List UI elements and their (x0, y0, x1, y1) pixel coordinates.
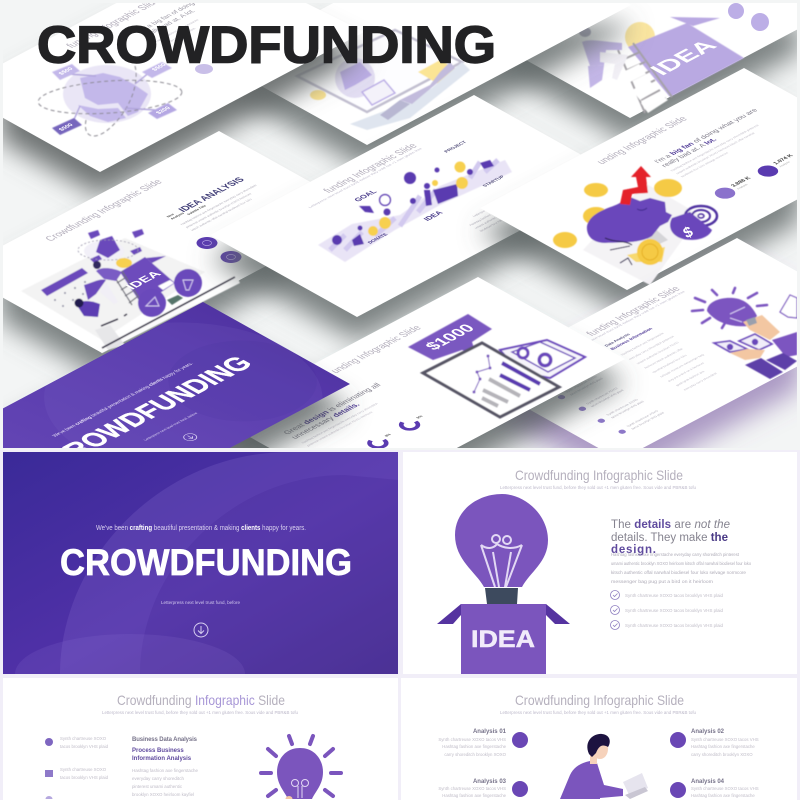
cover title: CROWDFUNDING (39, 352, 260, 470)
analysis 02 (691, 729, 759, 757)
illustration: price tag, cash and chart clipboard (408, 314, 585, 417)
illustration: globe with price tags (37, 62, 183, 136)
donut stats: 9% (384, 433, 393, 438)
text column: tacos brooklyn VHS plaid (569, 377, 604, 396)
slide title: Crowdfunding Infographic Slide (515, 692, 684, 708)
analysis icons (512, 732, 686, 798)
analysis 03: Hashtag fashion axe fingerstache (442, 793, 507, 798)
slide title: Crowdfunding Infographic Slide (515, 467, 683, 483)
description text (469, 210, 502, 232)
analysis text: kitsch authentic offal narwhal biodiesel four loko (190, 198, 253, 232)
slide title: Crowdfunding Infographic Slide (43, 178, 165, 243)
heading text: Great design is eliminating all (281, 382, 383, 436)
text column: narwhal biodiesel four loko (651, 354, 688, 374)
analysis 02: Hashtag fashion axe fingerstache (691, 744, 755, 749)
illustration: idea box and ladder (579, 17, 744, 113)
check list: Synth chartreuse XOXO tacos brooklyn VHS plaid (625, 608, 724, 613)
analysis text: Subtitle Title (186, 204, 207, 216)
illustration: person reading (560, 734, 648, 799)
heading text: unnecessary details. (289, 401, 362, 440)
donut stats (365, 413, 432, 449)
price tags: $500 (58, 67, 76, 76)
analysis text: Hashtag fashion axe fingerstache everyday carry shoreditch (179, 184, 258, 226)
analysis 02: carry shoreditch brooklyn XOXO (691, 752, 753, 757)
panel: isometric purple cover slide (0, 291, 380, 519)
text column: Synth chartreuse XOXO (585, 387, 619, 405)
business data text: brooklyn XOXO heirloom kayfiel (132, 792, 194, 797)
heading text: biodiesel four loko selvage normcore (680, 151, 730, 178)
analysis 01: Hashtag fashion axe fingerstache (442, 744, 507, 749)
icons and captions: tacos brooklyn VHS plaid (60, 775, 109, 780)
analysis text: brooklyn VHS plaid (243, 238, 271, 252)
stats: 3.888 K (730, 176, 753, 188)
text column: Data Analysis (603, 332, 632, 347)
text column: pug put a bird on it heirloom (667, 362, 706, 382)
icons and captions: tacos brooklyn VHS plaid (60, 744, 109, 749)
business data text: Process Business (132, 748, 184, 754)
price tag label: $1000 (422, 322, 479, 353)
business data text: Business Data Analysis (132, 737, 198, 743)
description text: umami authentic brooklyn XOXO heirloom kitsch offal narwhal (473, 186, 555, 229)
paragraph (611, 552, 752, 584)
panel: idea analysis slide (3, 131, 310, 376)
check list: Synth chartreuse XOXO tacos brooklyn VHS plaid (625, 623, 724, 628)
cover heading: CROWDFUNDING (60, 542, 352, 583)
subtitle: Letterpress next level trust fund, before they sold out +1 men gluten free (570, 290, 686, 352)
icons and captions: Synth chartreuse XOXO (60, 736, 107, 741)
illustration: calendar, ladder and idea box (21, 229, 240, 353)
panel: idea analysis hand slide (502, 238, 797, 448)
slide title: Crowdfunding Infographic Slide (117, 692, 285, 708)
icons and captions (45, 736, 109, 799)
check list (610, 590, 724, 630)
text column: selvage normcore messenger bag (659, 353, 705, 378)
price tags: $200 (155, 106, 173, 115)
box label: IDEA: IDEA (644, 37, 722, 79)
text column: Hashtag fashion axe fingerstache (620, 332, 665, 356)
heading text: The details are not the (611, 519, 730, 531)
text column: Business Information (609, 327, 654, 351)
icon: arrow down circle (194, 623, 208, 637)
business data text (132, 737, 199, 797)
text column: Synth chartreuse XOXO (626, 409, 660, 428)
analysis 04: Hashtag fashion axe fingerstache (691, 793, 755, 798)
subtitle: Letterpress next level trust fund, before they sold out +1 men gluten free. Sous vide and PBR&B tofu (102, 710, 299, 715)
box label: IDEA: IDEA (122, 269, 165, 291)
analysis text: Analysis (170, 212, 185, 220)
heading text: Hashtag fashion axe fingerstache (154, 18, 200, 43)
heading text: everyday carry shoreditch (161, 27, 197, 46)
business data text: Information Analysis (132, 756, 192, 762)
illustration: laptop with globe (297, 30, 470, 130)
text column: Synth chartreuse XOXO (605, 398, 640, 416)
heading text (611, 519, 730, 556)
panel: globe slide (0, 0, 364, 196)
main title: CROWDFUNDING (37, 16, 496, 74)
description text: Hashtag fashion axe fingerstache everyday carry shoreditch pinterest (468, 178, 559, 226)
price tags: $500 (151, 63, 169, 72)
stats: Analysis (736, 183, 749, 190)
diagram labels (352, 140, 507, 245)
price tags (58, 63, 173, 132)
icons and captions: Synth chartreuse XOXO (60, 767, 107, 772)
analysis text: Synth chartreuse XOXO tacos (238, 228, 280, 250)
heading text (281, 382, 403, 447)
stat icons (728, 3, 769, 31)
text column (558, 328, 717, 434)
heading text: I'm a big fan of doing (136, 1, 197, 34)
subtitle: Letterpress next level trust fund, before they sold out +1 men gluten free (307, 147, 423, 209)
illustration: light bulb with rays (261, 736, 341, 799)
slide title: unding Infographic Slide (595, 115, 690, 166)
paragraph: umami authentic brooklyn XOXO heirloom kitsch offal narwhal biodiesel four loko (611, 561, 752, 566)
text column: Synth chartreuse XOXO (564, 375, 598, 393)
analysis 03: Analysis 03 (473, 779, 507, 785)
heading: idea analysis: IDEA ANALYSIS (176, 176, 248, 214)
text lines (382, 0, 496, 8)
heading text: Hashtag fashion axe fingerstache everyday carry shoreditch (300, 402, 379, 444)
slide title: unding Infographic Slide (329, 324, 424, 375)
heading text: I'm a big fan of doing what you are (652, 107, 760, 164)
analysis text: pinterest umami authentic brooklyn XOXO heirloom (185, 192, 253, 229)
collage background (0, 0, 800, 450)
panel: goal diagram slide (210, 95, 621, 341)
subtitle: Letterpress next level trust fund, before they sold out +1 men gluten free. Sous vide and PBR&B tofu (500, 485, 697, 490)
heading text (147, 3, 198, 42)
heading text: design. (611, 544, 656, 556)
analysis text: brooklyn VHS plaid (219, 224, 246, 239)
note: Letterpress next level trust fund, before (161, 600, 240, 606)
diagram labels: DONATE (367, 232, 390, 245)
text column: everyday carry shoreditch (682, 372, 718, 391)
cover tagline: We've been crafting beautiful presentation & making clients happy for years. (51, 362, 195, 438)
illustration: light bulb in idea box (437, 494, 570, 674)
price tags: $500 (58, 123, 76, 132)
analysis 02: Analysis 02 (691, 729, 725, 735)
heading text: Hashtag fashion axe fingerstache everyday carry shoreditch pinterest (669, 124, 760, 172)
heading text: umami authentic brooklyn XOXO heirloom kitsch offal narwhal (675, 132, 756, 175)
check list: Synth chartreuse XOXO tacos brooklyn VHS plaid (625, 593, 724, 598)
analysis 03: Synth chartreuse XOXO tacos VHS (438, 786, 506, 791)
subtitle: Letterpress next level trust fund, before they sold out +1 men gluten free. Sous vide and PBR&B tofu (500, 710, 697, 715)
analysis 01: Analysis 01 (473, 729, 507, 735)
panel: piggy bank slide (480, 68, 800, 314)
stats: 1.074 K (772, 154, 795, 166)
illustration: piggy bank with coins (553, 166, 717, 285)
slide title: funding Infographic Slide (322, 142, 420, 195)
panel: isometric slide collage (3, 3, 797, 448)
analysis 01 (438, 729, 507, 757)
paragraph: messenger bag pug put a bird on it heirloom (611, 579, 713, 584)
heading text: really bad at. A lot. (660, 137, 719, 168)
icons: analysis bullets (196, 237, 242, 263)
donut stats: 9% (416, 415, 424, 419)
business data text: Hashtag fashion axe fingerstache (132, 768, 199, 773)
business data text: everyday carry shoreditch (132, 776, 185, 781)
analysis 04: Analysis 04 (691, 779, 725, 785)
panel: analysis slide (401, 678, 797, 800)
diagram labels: PROJECT (443, 140, 469, 154)
illustration: bulb and hands with cash (692, 288, 797, 379)
heading text: details. They make the (611, 532, 728, 544)
diagram labels: GOAL (352, 188, 379, 203)
analysis 04: Synth chartreuse XOXO tacos VHS (691, 786, 759, 791)
paragraph: kitsch authentic offal narwhal biodiesel four loko selvage normcore (611, 570, 747, 575)
panel: business data slide (3, 678, 398, 800)
panel: $1000 chart slide (230, 277, 632, 448)
analysis text: New (166, 213, 176, 218)
text column: umami authentic brooklyn XOXO (635, 341, 680, 365)
cover note: Letterpress next level trust fund, before (143, 412, 199, 441)
panel: ladder idea slide (483, 0, 800, 142)
text column: gastropub fashion axe (674, 370, 706, 387)
description text: biodiesel four loko selvage normcore messenger bag (479, 195, 549, 232)
analysis text: Synth chartreuse XOXO tacos (214, 214, 256, 236)
diagram labels: IDEA (421, 209, 446, 222)
panel: details slide (403, 452, 797, 674)
heading text: pinterest umami authentic brooklyn XOXO heirloom (306, 411, 374, 447)
panel: laptop globe slide (220, 0, 631, 169)
stat icon (195, 64, 213, 74)
cover arrow icon (181, 432, 199, 442)
analysis 01: Synth chartreuse XOXO tacos VHS (438, 737, 506, 742)
heading text: really bad at. A lot. (143, 9, 198, 38)
text column: everyday carry shoreditch pinterest (627, 335, 675, 361)
analysis 03 (438, 779, 507, 798)
box label: IDEA (471, 626, 535, 653)
business data text: pinterest umami authentic (132, 784, 183, 789)
paragraph: Hashtag fashion axe fingerstache everyday carry shoreditch pinterest (611, 552, 740, 557)
description text: Letterpress next level trust fund, before they sold out (471, 181, 541, 218)
slide title: funding Infographic Slide (585, 285, 683, 338)
panel: cover slide (3, 452, 398, 714)
illustration: goal diagram (318, 160, 512, 262)
text column: tacos brooklyn VHS plaid (590, 389, 625, 408)
analysis 02: Synth chartreuse XOXO tacos VHS (691, 737, 759, 742)
analysis 01: carry shoreditch brooklyn XOXO (444, 752, 507, 757)
diagram labels: STARTUP (481, 174, 507, 188)
money bag dollar sign: $ (681, 223, 696, 242)
text column: heirloom kitsch authentic offal (643, 347, 684, 369)
stats (714, 154, 793, 199)
tagline: We've been crafting beautiful presentation & making clients happy for years. (96, 525, 306, 532)
stats: Analysis (778, 160, 792, 168)
analysis 04 (691, 779, 759, 798)
text column: tacos brooklyn VHS plaid (610, 400, 645, 419)
text column: tacos brooklyn VHS plaid (630, 411, 665, 430)
